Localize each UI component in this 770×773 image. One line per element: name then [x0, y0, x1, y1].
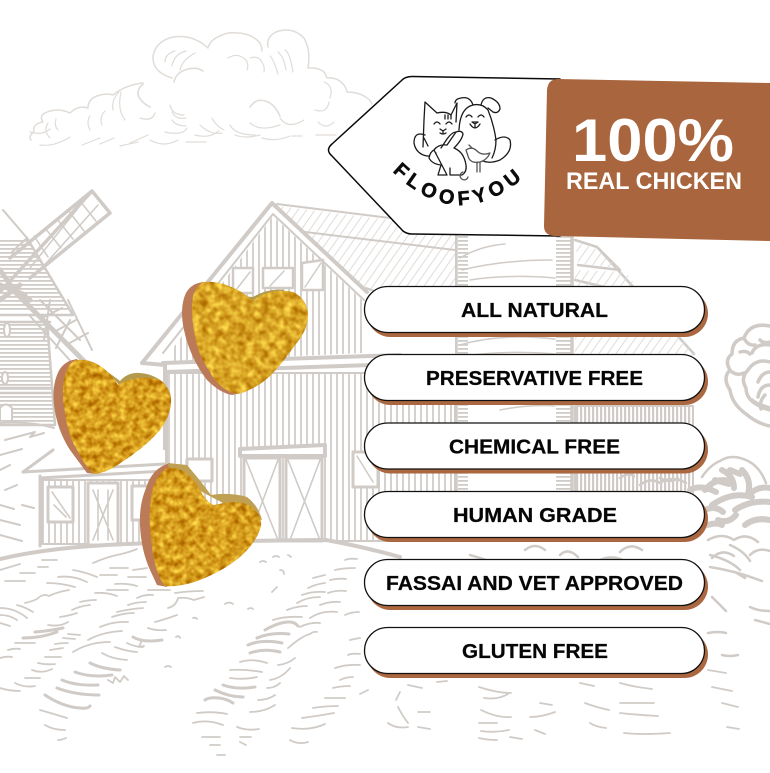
badge: fassai and vet approved: [364, 560, 708, 610]
cloud: [30, 30, 372, 146]
brown label shape: [544, 79, 770, 241]
badge: human grade: HUMAN GRADE: [453, 504, 617, 527]
badge: all natural: [364, 286, 708, 337]
tag shape: [328, 76, 560, 236]
badge: preservative free: [364, 354, 708, 405]
headline number: 100%: [572, 107, 734, 174]
tree and bushes: [470, 325, 770, 570]
badge: gluten free: [364, 628, 708, 678]
annex barn: [23, 450, 165, 548]
ground horizon: [0, 540, 400, 559]
brand name: [391, 170, 532, 205]
logo tag: [328, 76, 561, 237]
badge: all natural: ALL NATURAL: [461, 299, 608, 322]
icon: pets logo: [414, 98, 511, 180]
badge: chemical free: [364, 423, 708, 474]
badge: human grade: [364, 492, 708, 542]
silo and rear barn: [456, 232, 694, 498]
panel: 100% real chicken: [544, 79, 770, 241]
badge: gluten free: GLUTEN FREE: [462, 640, 608, 663]
badge: chemical free: CHEMICAL FREE: [449, 436, 620, 458]
logo tag: FLOOFYOU: [393, 162, 520, 206]
panel: benefit badges: [364, 286, 708, 678]
badge: fassai and vet approved: FASSAI AND VET APPROVED: [386, 572, 683, 595]
heart treat: bottom: [140, 463, 262, 587]
headline caption: REAL CHICKEN: [566, 168, 742, 195]
badge: preservative free: PRESERVATIVE FREE: [426, 367, 643, 390]
main barn: [142, 203, 455, 545]
heart treat: top right: [182, 282, 308, 395]
ploughed field strokes: [0, 549, 770, 755]
windmill: [0, 191, 110, 541]
heart treat: left: [53, 359, 171, 474]
